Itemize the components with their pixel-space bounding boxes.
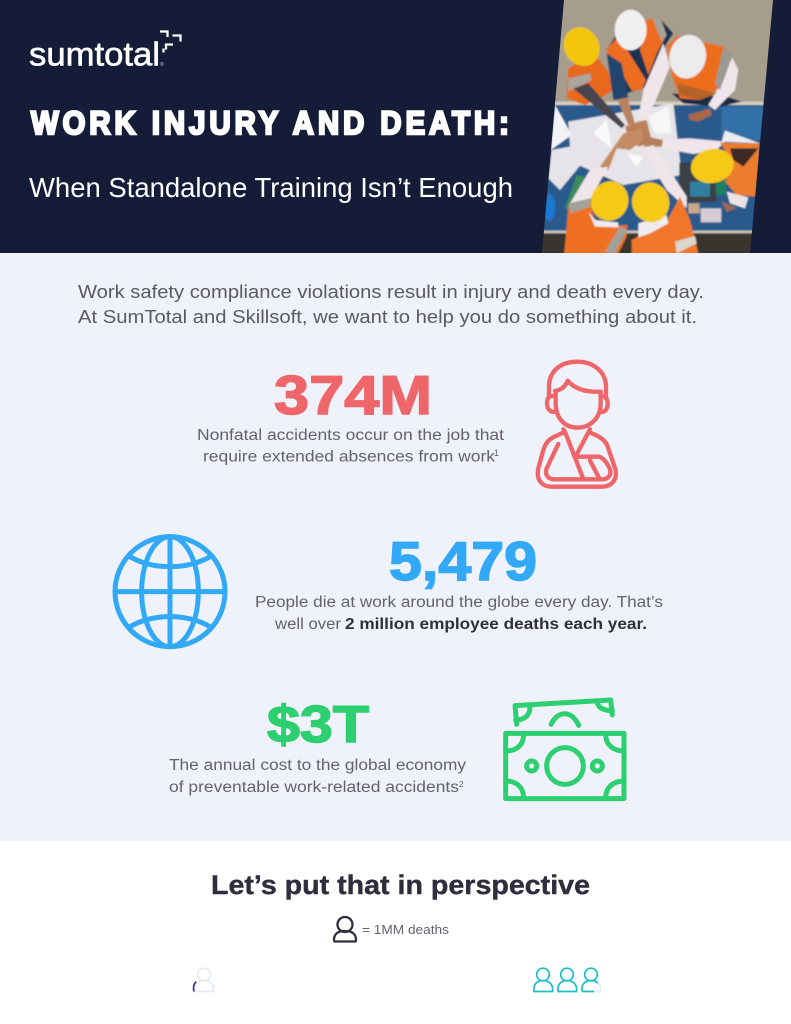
stat: 374M: require extended absences from work bbox=[203, 448, 495, 466]
heading: let's put that in perspective: Let’s put that in perspective bbox=[211, 870, 590, 900]
person icon row: left partial bbox=[194, 968, 214, 992]
stat: 374M: Nonfatal accidents occur on the job that bbox=[197, 427, 505, 444]
subtitle: When Standalone Training Isn’t Enough bbox=[29, 172, 513, 203]
stat: $3T: The annual cost to the global economy bbox=[169, 757, 466, 774]
stat: 374M bbox=[197, 364, 505, 466]
stat: 5,479: well over bbox=[274, 616, 341, 633]
electronics bbox=[679, 163, 717, 202]
panel: statistics bbox=[0, 253, 791, 841]
worker top bbox=[607, 17, 673, 93]
stat: 374M: 1 bbox=[494, 448, 499, 458]
bottom workers bbox=[570, 167, 608, 203]
paper bbox=[548, 103, 682, 190]
icon: globe bbox=[115, 537, 225, 647]
helmets bbox=[562, 26, 600, 67]
stat: 5,479: 5,479 bbox=[389, 530, 537, 592]
stat: $3T: $3T bbox=[267, 696, 369, 754]
stat: 5,479: 2 million employee deaths each year. bbox=[345, 616, 647, 633]
person icon row: right teal bbox=[534, 968, 601, 992]
stat: 5,479: People die at work around the globe every day. That’s bbox=[255, 594, 663, 611]
stat: 5,479 bbox=[255, 530, 663, 633]
stat: $3T bbox=[169, 696, 466, 796]
icon: banknotes bbox=[506, 700, 624, 799]
legend: 1MM deaths bbox=[334, 917, 450, 942]
intro text bbox=[78, 281, 704, 327]
header band bbox=[0, 0, 791, 257]
worker left bbox=[567, 57, 613, 105]
title: WORK INJURY AND DEATH: bbox=[31, 105, 509, 141]
logo: sumtotal: sumtotal bbox=[29, 36, 160, 72]
legend: 1MM deaths: = 1MM deaths bbox=[362, 922, 450, 937]
stat: $3T: 2 bbox=[459, 779, 464, 789]
icon: injured person with arm sling bbox=[538, 362, 616, 487]
intro text: At SumTotal and Skillsoft, we want to help you do something about it. bbox=[78, 306, 697, 327]
right sleeve bbox=[663, 138, 725, 154]
worker right white shirt bbox=[672, 93, 742, 107]
stat: 374M: 374M bbox=[274, 364, 432, 426]
stat: $3T: of preventable work-related accidents bbox=[169, 779, 459, 796]
logo: sumtotal: ® bbox=[160, 61, 164, 68]
photo: construction workers joining hands bbox=[542, 0, 773, 253]
intro text: Work safety compliance violations result in injury and death every day. bbox=[78, 281, 704, 302]
hands bbox=[625, 120, 652, 147]
